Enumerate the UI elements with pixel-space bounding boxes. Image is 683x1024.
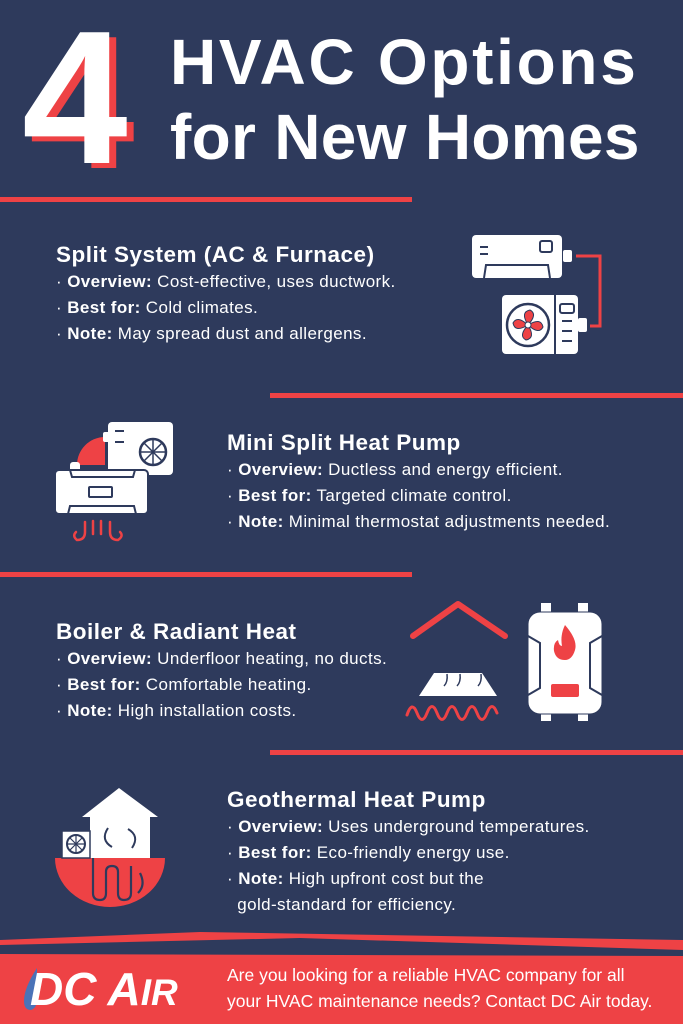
bullets: · Note: High installation costs. [56, 701, 297, 720]
bullets: · Overview: Uses underground temperatures. [227, 817, 590, 836]
bullets: · Overview: Ductless and energy efficient. [227, 460, 563, 479]
heading: Split System (AC & Furnace) [56, 242, 375, 267]
heading: Boiler & Radiant Heat [56, 619, 297, 644]
bullets: · Note: May spread dust and allergens. [56, 324, 367, 343]
icon: geothermal [55, 788, 165, 907]
title: HVAC Options [170, 26, 639, 98]
footer band [0, 932, 683, 1024]
icon: mini split [56, 422, 173, 542]
call to action: your HVAC maintenance needs? Contact DC Air today. [227, 991, 652, 1011]
bullets: · Best for: Targeted climate control. [227, 486, 512, 505]
bullets [227, 460, 610, 531]
bullets: · Best for: Eco-friendly energy use. [227, 843, 510, 862]
bullets [227, 817, 590, 914]
bullets: · Note: Minimal thermostat adjustments needed. [227, 512, 610, 531]
bullets: · Best for: Comfortable heating. [56, 675, 312, 694]
title: for New Homes [170, 101, 640, 173]
bullets: · Overview: Cost-effective, uses ductwork. [56, 272, 396, 291]
call to action: Are you looking for a reliable HVAC company for all [227, 965, 625, 985]
icon: split system units [472, 235, 602, 354]
panel: mini split heat pump [227, 430, 610, 531]
bullets: · Note: High upfront cost but the [227, 869, 484, 888]
title [170, 26, 640, 173]
big number 4: 4 [29, 0, 135, 209]
icon: radiant floor and boiler [406, 601, 602, 721]
heading: Geothermal Heat Pump [227, 787, 486, 812]
bullets [56, 649, 387, 720]
call to action [227, 965, 652, 1011]
bullets: gold-standard for efficiency. [237, 895, 456, 914]
bullets [56, 272, 396, 343]
bullets: · Overview: Underfloor heating, no ducts. [56, 649, 387, 668]
panel: geothermal heat pump [227, 787, 590, 914]
panel: split system [56, 242, 396, 343]
heading: Mini Split Heat Pump [227, 430, 461, 455]
bullets: · Best for: Cold climates. [56, 298, 258, 317]
panel: boiler & radiant heat [56, 619, 387, 720]
logo: DC Air: DC AIR [30, 963, 178, 1015]
